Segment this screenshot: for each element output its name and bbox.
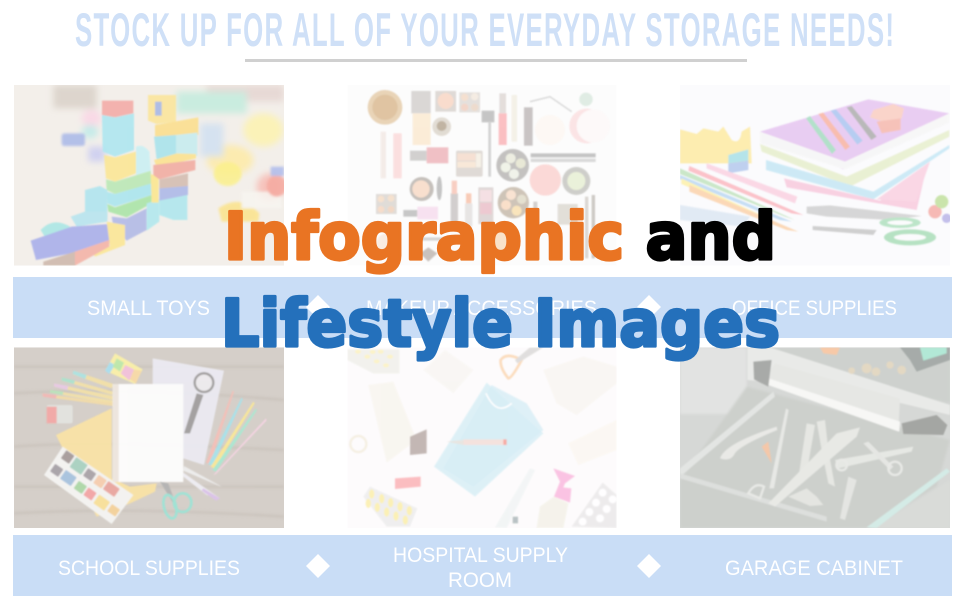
- label: small toys: SMALL TOYS: [87, 297, 210, 320]
- photo: office supplies: [680, 98, 950, 246]
- photo: hospital supply room: [347, 347, 617, 528]
- icon: diamond separator: [637, 295, 661, 319]
- title: STOCK UP FOR ALL OF YOUR EVERYDAY STORAGE NEEDS!: [75, 5, 894, 57]
- label: hospital supply room: [393, 544, 568, 592]
- headline line 1: Infographic and: [224, 200, 776, 275]
- icon: diamond separator: [637, 554, 661, 578]
- photo: garage cabinet: [680, 347, 950, 528]
- label: hospital supply room: HOSPITAL SUPPLY: [393, 544, 568, 567]
- label: garage cabinet: GARAGE CABINET: [725, 557, 903, 580]
- label bar: second row: [13, 535, 952, 596]
- icon: diamond separator: [306, 554, 330, 578]
- label: school supplies: SCHOOL SUPPLIES: [58, 557, 240, 580]
- photo: small toys: [14, 85, 287, 266]
- label: makeup accessories: MAKEUP ACCESSORIES: [366, 297, 597, 320]
- photo: makeup accessories: [366, 89, 596, 262]
- label: hospital supply room: ROOM: [448, 569, 512, 592]
- icon: diamond separator: [306, 295, 330, 319]
- title underline: [245, 59, 747, 62]
- photo: school supplies: [14, 347, 284, 528]
- label: office supplies: OFFICE SUPPLIES: [732, 297, 897, 320]
- headline line 2: Lifestyle Images: [221, 287, 780, 362]
- label bar: first row: [13, 277, 952, 338]
- overlay headline: [221, 200, 780, 362]
